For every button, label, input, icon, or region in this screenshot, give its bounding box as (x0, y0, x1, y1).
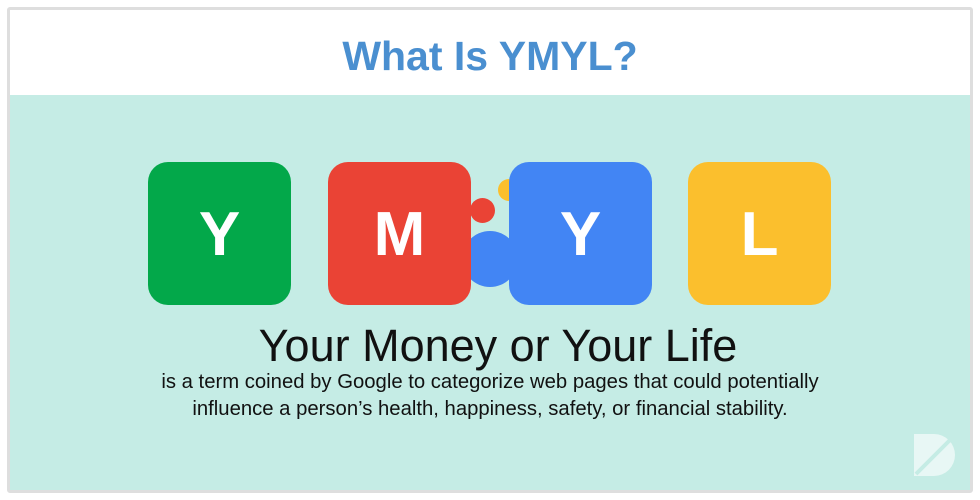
tile: Y blue: Y (560, 200, 601, 269)
icon: logo (914, 434, 955, 476)
description text (161, 371, 819, 420)
tile: Y green (148, 162, 291, 305)
description text: is a term coined by Google to categorize web pages that could potentially (161, 371, 819, 393)
description text: influence a person’s health, happiness, safety, or financial stability. (192, 398, 788, 420)
puzzle connectors (471, 179, 510, 287)
tile: M red (328, 162, 471, 305)
heading: Your Money or Your Life: Your Money or Your Life (259, 320, 737, 371)
tile: L yellow (688, 162, 831, 305)
tile: Y green: Y (199, 200, 240, 269)
tile: L yellow: L (741, 200, 778, 269)
title: What Is YMYL? (342, 33, 638, 79)
tile: Y blue (509, 162, 652, 305)
tile: M red: M (374, 200, 425, 269)
